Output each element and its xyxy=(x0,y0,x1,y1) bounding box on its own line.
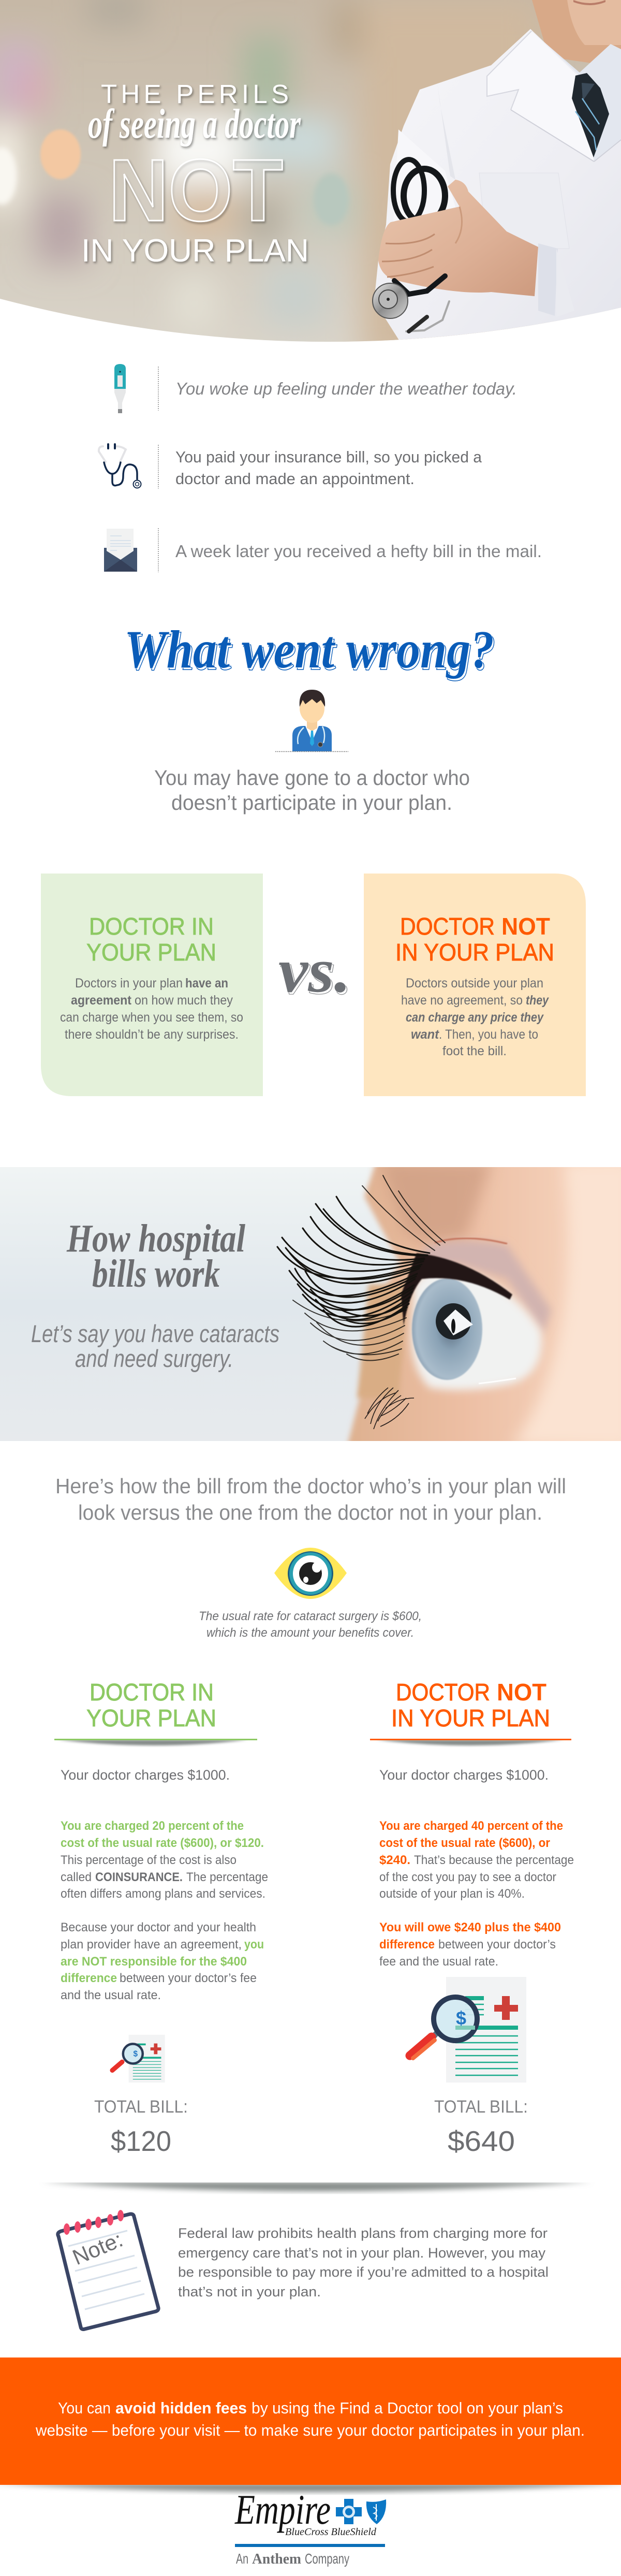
paragraph: agreement: between your doctor’s fee xyxy=(120,1971,257,1985)
paragraph: you will owe: You will owe $240 plus the $400 xyxy=(379,1920,561,1934)
step 2 text xyxy=(175,448,482,488)
step 3: envelope and text xyxy=(104,528,542,572)
step 1: thermometer and text xyxy=(114,364,517,413)
step 1 text: You woke up feeling under the weather today. xyxy=(175,379,517,398)
intro text: doesn’t participate in your plan. xyxy=(171,791,452,814)
coat pocket xyxy=(479,173,569,249)
heading: What went wrong?: What went wrong? xyxy=(124,620,494,679)
panel body xyxy=(401,976,549,1058)
eye photo: eyeball xyxy=(411,1268,541,1390)
panel body xyxy=(60,976,243,1042)
hero title: of seeing a doctor xyxy=(88,101,301,147)
panel body: can charge when you see them, so xyxy=(60,1010,243,1025)
tie xyxy=(572,73,609,157)
logo tagline: Anthem xyxy=(252,2551,301,2567)
section text: cataracts: and need surgery. xyxy=(75,1345,233,1372)
column heading xyxy=(391,1679,550,1731)
panel heading xyxy=(86,913,216,966)
icon: eye xyxy=(274,1548,347,1599)
eye photo: upper lid lash band xyxy=(401,1253,512,1326)
shirt xyxy=(544,42,621,161)
paragraph: agreement: Because your doctor and your health xyxy=(61,1920,256,1934)
eye photo: skin xyxy=(347,1162,621,1446)
panel heading: NOT xyxy=(501,913,550,940)
column heading: DOCTOR IN xyxy=(90,1679,214,1706)
note text: Federal law prohibits health plans from charging more for xyxy=(178,2225,548,2241)
paragraph: 40 percent: That’s because the percentage xyxy=(414,1853,574,1867)
callout text xyxy=(35,2399,585,2439)
section text: cataracts: Let’s say you have cataracts xyxy=(31,1320,279,1347)
lab coat body xyxy=(374,29,621,342)
panel body: on how much they xyxy=(135,993,233,1008)
logo: Empire BlueCross BlueShield: Empire xyxy=(234,2486,331,2533)
paragraph: agreement: difference xyxy=(61,1971,117,1985)
icon: notepad: Note: xyxy=(69,2227,126,2269)
note text: be responsible to pay more if you’re admitted to a hospital xyxy=(178,2264,549,2280)
paragraph: coinsurance: This percentage of the cost is also xyxy=(61,1853,236,1867)
column heading: YOUR PLAN xyxy=(86,1705,216,1731)
logo tagline: Company xyxy=(305,2551,349,2567)
stethoscope tubing behind hand xyxy=(393,159,445,223)
column heading: DOCTOR xyxy=(396,1679,490,1706)
icon: small bill: $ xyxy=(133,2049,138,2058)
total bill: $640 xyxy=(448,2125,515,2157)
eye photo: eyelid xyxy=(419,1241,551,1333)
coat collar and lapel xyxy=(527,68,594,161)
paragraph: coinsurance: You are charged 20 percent of the xyxy=(61,1819,244,1833)
orange callout band xyxy=(0,2357,621,2485)
comparison intro text xyxy=(55,1474,566,1524)
icon: small bill xyxy=(112,2035,165,2083)
panel heading xyxy=(395,913,554,966)
caption: usual rate: which is the amount your benefits cover. xyxy=(206,1626,414,1640)
paragraph: 40 percent: outside of your plan is 40%. xyxy=(379,1887,525,1901)
logo tagline: An xyxy=(236,2551,248,2567)
panel: doctor not in your plan xyxy=(364,874,586,1096)
paragraph: 40 percent: of the cost you pay to see a doctor xyxy=(379,1870,556,1884)
panel body: want xyxy=(411,1027,440,1042)
panel body: Doctors outside your plan xyxy=(406,976,543,991)
icon: stethoscope xyxy=(99,444,141,488)
total bill: TOTAL BILL: xyxy=(434,2097,528,2117)
intro text xyxy=(154,766,470,814)
face and neck xyxy=(532,0,621,67)
step 3 text: A week later you received a hefty bill in the mail. xyxy=(175,542,542,561)
hero blurred background xyxy=(0,0,621,342)
paragraph: coinsurance xyxy=(61,1819,268,1901)
total bill: TOTAL BILL: xyxy=(94,2097,188,2117)
paragraph: you will owe: between your doctor’s xyxy=(438,1938,556,1952)
caption: usual rate: The usual rate for cataract surgery is $600, xyxy=(199,1609,422,1623)
eye photo: eyelashes xyxy=(277,1175,445,1361)
step 2 text: doctor and made an appointment. xyxy=(175,470,415,488)
panel body: Doctors in your plan xyxy=(75,976,183,991)
callout text: by using the Find a Doctor tool on your plan’s xyxy=(252,2399,563,2417)
total bill: $120 xyxy=(111,2125,171,2157)
coat cuff xyxy=(538,243,558,316)
note text: emergency care that’s not in your plan. However, you may xyxy=(178,2245,546,2261)
doctor photo xyxy=(373,0,621,342)
column heading: IN YOUR PLAN xyxy=(391,1705,550,1731)
paragraph: agreement: are NOT responsible for the $400 xyxy=(61,1955,247,1969)
panel body: foot the bill. xyxy=(442,1044,507,1058)
intro text: You may have gone to a doctor who xyxy=(154,766,470,790)
panel body: have no agreement, so xyxy=(401,993,523,1008)
coat sleeve shade xyxy=(397,129,402,143)
panel heading: DOCTOR IN xyxy=(89,913,214,940)
paragraph: coinsurance: cost of the usual rate ($600), or $120. xyxy=(61,1836,264,1850)
icon: large bill: $ xyxy=(456,2007,466,2029)
paragraph: agreement: plan provider have an agreement, xyxy=(61,1938,242,1952)
panel body: . Then, you have to xyxy=(439,1027,538,1042)
column: doctor not in your plan xyxy=(370,1679,574,2157)
logo shield xyxy=(366,2499,386,2524)
panel heading: YOUR PLAN xyxy=(86,939,216,966)
section text: cataracts xyxy=(31,1320,279,1372)
vs.: vs. xyxy=(278,936,351,1006)
paragraph: 40 percent xyxy=(379,1819,574,1901)
note text xyxy=(178,2225,549,2300)
note section xyxy=(57,2210,549,2330)
hand xyxy=(378,180,538,296)
eye photo: lower lashes xyxy=(365,1388,414,1429)
comparison intro text: Here’s how the bill from the doctor who’s in your plan will xyxy=(55,1474,566,1498)
column heading: NOT xyxy=(497,1679,546,1706)
panel body: have an xyxy=(185,976,228,991)
icon: doctor avatar xyxy=(275,690,348,752)
panel body: there shouldn’t be any surprises. xyxy=(65,1027,239,1042)
panel heading: IN YOUR PLAN xyxy=(395,939,554,966)
hero title xyxy=(81,79,309,269)
step 2 text: You paid your insurance bill, so you picked a xyxy=(175,448,482,466)
icon: large bill xyxy=(410,1977,526,2083)
callout text: avoid hidden fees xyxy=(115,2399,247,2417)
charge text: Your doctor charges $1000. xyxy=(61,1767,230,1783)
step 2: stethoscope and text xyxy=(99,444,482,489)
heading: What went wrong?: What went wrong? xyxy=(126,622,496,681)
eye photo banner xyxy=(0,1162,621,1446)
total bill xyxy=(94,2097,188,2157)
panel body: they xyxy=(526,993,549,1008)
paragraph: 40 percent: cost of the usual rate ($600), or xyxy=(379,1836,550,1850)
hero title: THE PERILS xyxy=(101,79,289,109)
logo tagline xyxy=(236,2551,349,2567)
paragraph: agreement: you xyxy=(244,1938,264,1952)
column heading xyxy=(86,1679,216,1731)
paragraph: you will owe: difference xyxy=(379,1938,435,1952)
panel body: can charge any price they xyxy=(406,1010,544,1025)
section heading: how hospital bills work: bills work xyxy=(92,1252,220,1296)
vs.: vs. xyxy=(280,938,352,1008)
stethoscope tubing and chestpiece xyxy=(394,276,449,331)
column: doctor in your plan xyxy=(54,1679,268,2157)
section heading: how hospital bills work: How hospital xyxy=(66,1217,245,1260)
hero title: IN YOUR PLAN xyxy=(81,233,309,269)
charge text: Your doctor charges $1000. xyxy=(379,1767,549,1783)
logo: Empire BlueCross BlueShield xyxy=(234,2486,386,2567)
paragraph: coinsurance: called xyxy=(61,1870,92,1884)
paragraph: agreement: and the usual rate. xyxy=(61,1988,161,2002)
paragraph: agreement xyxy=(61,1920,264,2002)
paragraph: 40 percent: $240. xyxy=(379,1853,410,1867)
hero banner xyxy=(0,0,621,342)
hero title: NOT xyxy=(109,141,283,240)
icon: notepad xyxy=(57,2210,158,2330)
paragraph: you will owe: fee and the usual rate. xyxy=(379,1955,498,1969)
logo: Empire BlueCross BlueShield: BlueCross BlueShield xyxy=(285,2526,377,2538)
callout text: You can xyxy=(58,2399,111,2417)
panel heading: DOCTOR xyxy=(400,913,495,940)
panel: doctor in your plan xyxy=(41,874,263,1096)
paragraph: coinsurance: The percentage xyxy=(186,1870,268,1884)
paragraph: coinsurance: often differs among plans and services. xyxy=(61,1887,265,1901)
panel body: agreement xyxy=(71,993,132,1008)
section heading: how hospital bills work xyxy=(66,1217,245,1296)
callout text: website — before your visit — to make sure your doctor participates in your plan. xyxy=(35,2421,585,2439)
comparison intro text: look versus the one from the doctor not in your plan. xyxy=(78,1501,542,1524)
icon: thermometer xyxy=(114,364,126,413)
caption: usual rate xyxy=(199,1609,422,1640)
logo cross xyxy=(336,2499,362,2524)
total bill xyxy=(434,2097,528,2157)
paragraph: coinsurance: COINSURANCE. xyxy=(95,1870,183,1884)
paragraph: 40 percent: You are charged 40 percent of the xyxy=(379,1819,563,1833)
icon: envelope with bill xyxy=(104,529,137,572)
paragraph: you will owe xyxy=(379,1920,561,1969)
note text: that’s not in your plan. xyxy=(178,2284,321,2300)
